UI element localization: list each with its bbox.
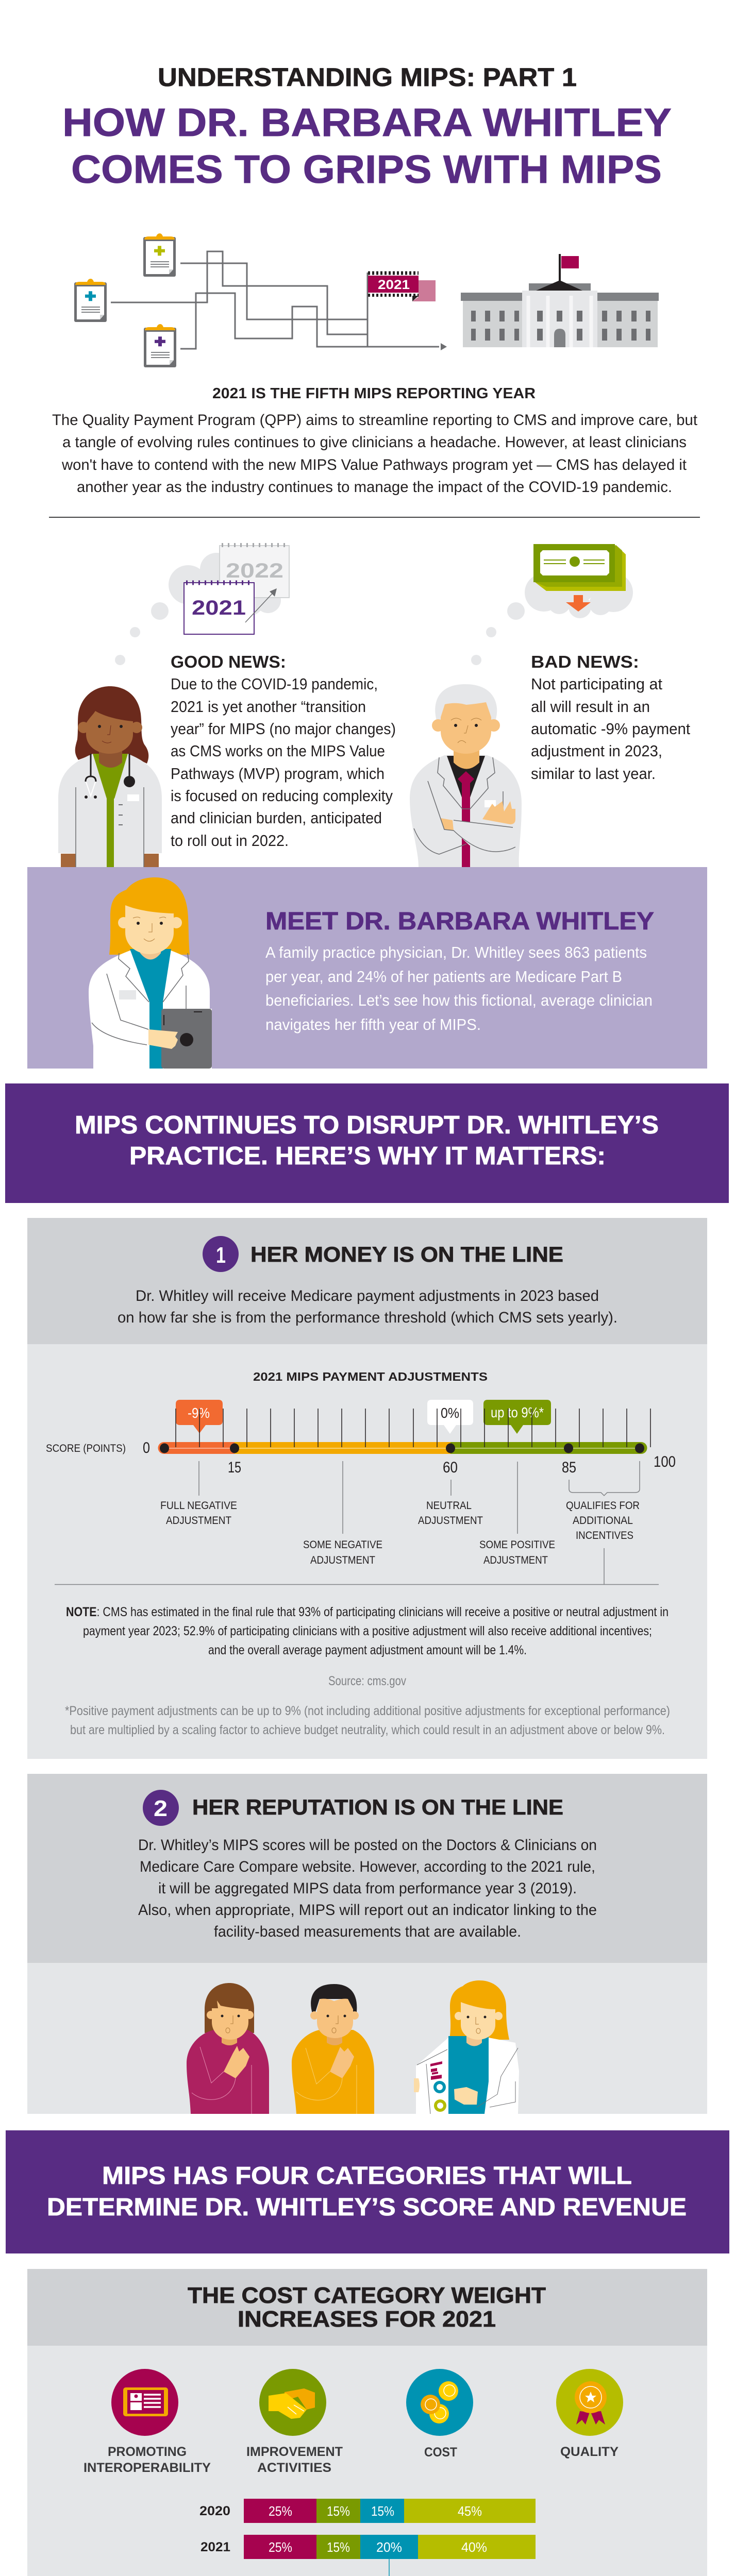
illustration: clipboards routed through a tangle of lines to government building	[74, 233, 659, 367]
arrow head	[441, 343, 447, 350]
callout: up to 9%: up to 9%*	[491, 1404, 544, 1420]
score markers	[160, 1444, 644, 1453]
good news text	[171, 652, 396, 850]
panel: good news	[58, 545, 396, 867]
paragraph: won't have to contend with the new MIPS Value Pathways program yet — CMS has delayed it	[61, 456, 687, 473]
range labels: SOME POSITIVE	[479, 1539, 555, 1551]
woman in magenta, shocked	[187, 1983, 269, 2114]
label: COST	[424, 2445, 457, 2460]
number badge 1	[203, 1236, 239, 1272]
main title: HOW DR. BARBARA WHITLEY	[62, 100, 672, 145]
good news text: Pathways (MVP) program, which	[171, 765, 385, 783]
icon: tablet	[111, 2369, 178, 2436]
bar 2020: 15%	[327, 2503, 350, 2519]
eyebrow title: UNDERSTANDING MIPS: PART 1	[158, 63, 577, 92]
good news text: GOOD NEWS:	[171, 652, 286, 671]
description	[265, 943, 653, 1033]
panel: her reputation is on the line	[27, 1774, 707, 2114]
heading	[188, 2283, 546, 2332]
heading: INCREASES FOR 2021	[238, 2307, 496, 2332]
icon: calendar 2021: 2021	[192, 597, 246, 619]
range labels: ADJUSTMENT	[166, 1515, 231, 1527]
number badge 1: 1	[216, 1243, 226, 1268]
banner: why it matters: PRACTICE. HERE’S WHY IT MATTERS:	[129, 1142, 606, 1170]
description: per year, and 24% of her patients are Medicare Part B	[265, 968, 622, 986]
range labels: INCENTIVES	[576, 1530, 633, 1541]
bar 2020	[199, 2499, 536, 2523]
banner: four categories: DETERMINE DR. WHITLEY’S SCORE AND REVENUE	[47, 2194, 687, 2221]
note: and the overall average payment adjustment amount will be 1.4%.	[208, 1643, 527, 1657]
category: improvement activities	[246, 2369, 343, 2475]
bar 2021: 25%	[269, 2539, 292, 2555]
panel: cost category weight	[27, 2269, 707, 2576]
bar 2021	[201, 2535, 536, 2559]
description: navigates her fifth year of MIPS.	[265, 1015, 481, 1033]
axis ticks	[176, 1409, 650, 1447]
female doctor with stethoscope	[58, 686, 162, 867]
bad news text: Not participating at	[531, 675, 662, 693]
banner: four categories: MIPS HAS FOUR CATEGORIES THAT WILL	[102, 2162, 632, 2190]
icon: calendar 2022: 2022	[226, 560, 283, 582]
icon: calendar 2021	[184, 583, 254, 634]
bad news text: automatic -9% payment	[531, 720, 690, 738]
thought cloud with calendars	[115, 545, 289, 665]
note leader	[183, 2559, 553, 2576]
description	[138, 1837, 597, 1940]
note: payment year 2023; 52.9% of participating clinicians with a positive adjustment will also receive additional incentives;	[83, 1624, 652, 1638]
heading: HER REPUTATION IS ON THE LINE	[192, 1795, 563, 1819]
score values: 0	[143, 1439, 150, 1456]
panel: meet Dr. Whitley	[27, 867, 707, 1069]
main title	[62, 100, 672, 192]
description: it will be aggregated MIPS data from performance year 3 (2019).	[158, 1880, 577, 1897]
bad news text: adjustment in 2023,	[531, 742, 662, 760]
heading: THE COST CATEGORY WEIGHT	[188, 2283, 546, 2308]
paragraph: The Quality Payment Program (QPP) aims to streamline reporting to CMS and improve care, but	[52, 412, 698, 429]
callout: 0%: 0%	[441, 1405, 459, 1421]
range labels: ADJUSTMENT	[483, 1554, 548, 1566]
score axis label: SCORE (POINTS)	[46, 1443, 126, 1454]
range labels	[160, 1500, 640, 1566]
tangled lines	[111, 251, 368, 334]
bar 2021: 20%	[376, 2539, 402, 2555]
main title: COMES TO GRIPS WITH MIPS	[71, 147, 662, 192]
paragraph	[52, 412, 698, 496]
range labels: SOME NEGATIVE	[303, 1539, 382, 1551]
bad news text: all will result in an	[531, 698, 650, 716]
paragraph: a tangle of evolving rules continues to give clinicians a headache. However, at least clinicians	[62, 434, 687, 451]
label: INTEROPERABILITY	[83, 2461, 211, 2475]
chart: 2021 MIPS payment adjustments	[46, 1370, 676, 1585]
panel: her money is on the line	[27, 1218, 707, 1759]
icon: down arrow	[566, 595, 591, 612]
category: cost	[406, 2369, 473, 2460]
icon: coins	[406, 2369, 473, 2436]
heading: HER MONEY IS ON THE LINE	[250, 1242, 563, 1266]
banner flag 2021	[368, 273, 436, 301]
description: beneficiaries. Let’s see how this fictional, average clinician	[265, 991, 653, 1009]
intro text: Dr. Whitley will receive Medicare payment adjustments in 2023 based	[136, 1287, 599, 1304]
bar 2020: 15%	[371, 2503, 394, 2519]
bar 2021: 15%	[327, 2539, 350, 2555]
bar 2020: 25%	[269, 2503, 292, 2519]
score values: 15	[228, 1459, 241, 1476]
good news text: to roll out in 2022.	[171, 832, 289, 850]
range labels: FULL NEGATIVE	[160, 1500, 237, 1512]
good news text: year” for MIPS (no major changes)	[171, 720, 396, 738]
range labels: ADDITIONAL	[573, 1515, 633, 1527]
label	[83, 2445, 211, 2475]
arrow up to 2022	[245, 588, 277, 622]
good news text: is focused on reducing complexity	[171, 787, 393, 805]
paragraph: another year as the industry continues to manage the impact of the COVID-19 pandemic.	[77, 479, 672, 496]
label	[246, 2445, 343, 2475]
score values: 100	[654, 1453, 676, 1470]
callout: -9%: -9%	[188, 1405, 210, 1421]
footnote	[65, 1704, 670, 1737]
icon: handshake	[259, 2369, 326, 2436]
icon: calendar 2022	[220, 545, 289, 598]
callout: up to 9%	[483, 1400, 551, 1434]
description: Medicare Care Compare website. However, according to the 2021 rule,	[140, 1858, 595, 1875]
intro text block	[52, 385, 698, 496]
good news text: Due to the COVID-19 pandemic,	[171, 675, 378, 693]
description: A family practice physician, Dr. Whitley sees 863 patients	[265, 943, 647, 961]
bad news text	[531, 652, 690, 783]
banner flag 2021: 2021	[378, 278, 410, 292]
score values: 85	[562, 1459, 576, 1476]
range labels: QUALIFIES FOR	[566, 1500, 640, 1512]
number badge 2	[143, 1790, 179, 1826]
chart title: 2021 MIPS PAYMENT ADJUSTMENTS	[253, 1370, 488, 1383]
callout: 0%	[427, 1400, 473, 1434]
range labels: NEUTRAL	[426, 1500, 472, 1512]
banner: four categories	[6, 2130, 729, 2253]
description: Also, when appropriate, MIPS will report out an indicator linking to the	[138, 1902, 597, 1919]
description: Dr. Whitley’s MIPS scores will be posted on the Doctors & Clinicians on	[138, 1837, 597, 1854]
Dr. Whitley holding report, shocked	[414, 1980, 519, 2114]
score values: 60	[443, 1459, 458, 1476]
heading: MEET DR. BARBARA WHITLEY	[265, 908, 654, 935]
banner: why it matters	[5, 1083, 729, 1203]
icon: money stack	[533, 544, 626, 591]
man in yellow, shocked	[292, 1984, 374, 2114]
bad news text: similar to last year.	[531, 765, 656, 783]
subheading: 2021 IS THE FIFTH MIPS REPORTING YEAR	[212, 385, 536, 402]
Dr. Whitley portrait with tablet	[89, 877, 212, 1069]
good news text: as CMS works on the MIPS Value	[171, 742, 385, 760]
range labels: ADJUSTMENT	[310, 1554, 375, 1566]
label: PROMOTING	[108, 2445, 187, 2459]
intro text: on how far she is from the performance threshold (which CMS sets yearly).	[118, 1309, 617, 1326]
note	[66, 1605, 669, 1657]
category: promoting interoperability	[83, 2369, 211, 2475]
source: Source: cms.gov	[328, 1674, 406, 1688]
number badge 2: 2	[154, 1796, 168, 1821]
score values	[143, 1439, 676, 1476]
icon: capitol building	[461, 254, 659, 347]
label: IMPROVEMENT	[246, 2445, 343, 2459]
leader lines	[55, 1461, 659, 1585]
score bar	[158, 1442, 647, 1454]
range labels: ADJUSTMENT	[418, 1515, 483, 1527]
thought cloud with money	[471, 544, 633, 665]
bar 2021: 2021	[201, 2540, 230, 2554]
icon: clipboard lime	[143, 233, 176, 277]
intro text	[118, 1287, 617, 1326]
callout: -9%	[176, 1400, 223, 1433]
category: quality	[556, 2369, 623, 2459]
good news text: and clinician burden, anticipated	[171, 809, 382, 827]
banner: why it matters: MIPS CONTINUES TO DISRUPT DR. WHITLEY’S	[75, 1111, 659, 1139]
bar 2021: 40%	[461, 2539, 487, 2555]
icon: clipboard purple	[144, 324, 176, 367]
description: facility-based measurements that are available.	[214, 1923, 521, 1940]
bar 2020: 45%	[458, 2503, 482, 2519]
header section	[62, 63, 672, 192]
bar 2020: 2020	[199, 2504, 230, 2518]
male doctor with arms crossed	[410, 684, 522, 867]
label: ACTIVITIES	[257, 2461, 331, 2475]
panel: bad news	[410, 544, 690, 867]
good news text: 2021 is yet another “transition	[171, 698, 366, 716]
label: QUALITY	[560, 2445, 619, 2459]
icon: clipboard blue	[74, 279, 107, 322]
stacked bar chart	[199, 2499, 536, 2559]
bad news text: BAD NEWS:	[531, 652, 639, 671]
icon: rosette	[556, 2369, 623, 2436]
